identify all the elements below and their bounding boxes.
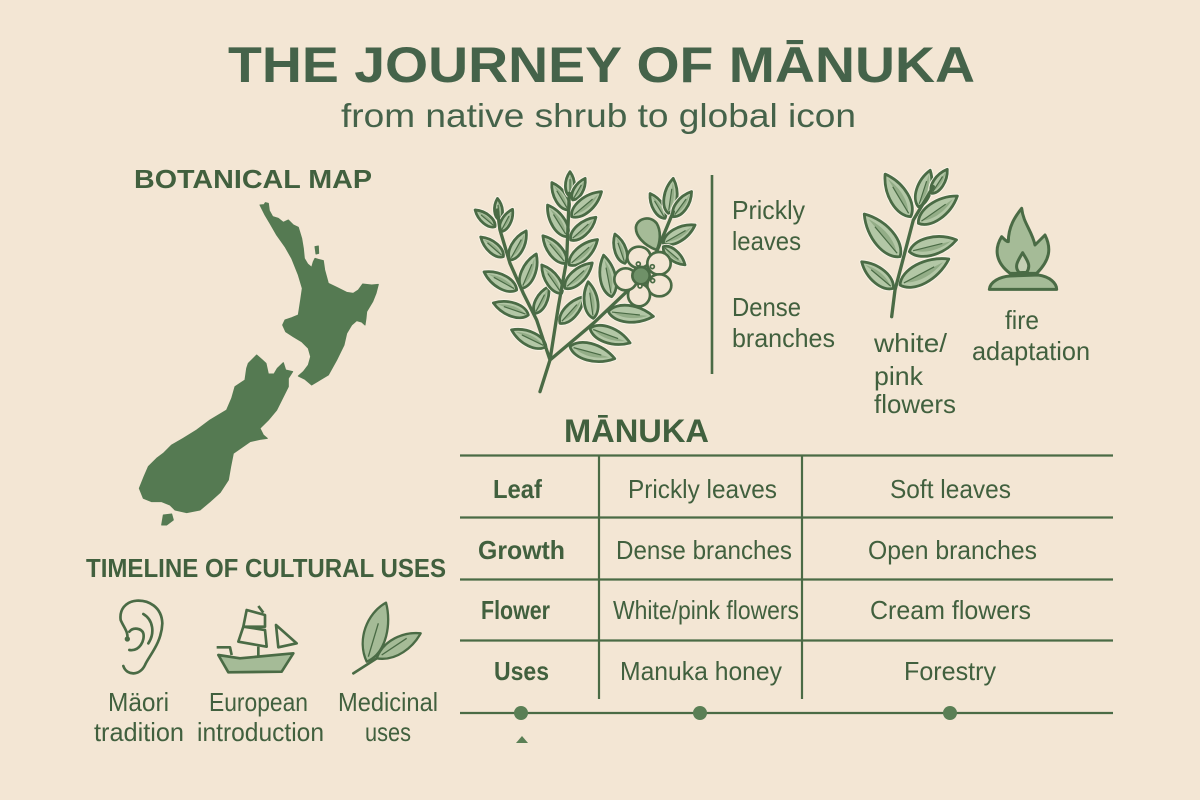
icon: fire <box>989 208 1057 289</box>
south island <box>139 355 293 513</box>
trait labels: Prickly <box>732 195 805 225</box>
timeline labels: Mäori <box>108 687 169 717</box>
icon: ship <box>217 606 297 672</box>
label: white/pink flowers <box>873 328 956 419</box>
table grid <box>460 455 1113 699</box>
icon: medicinal leaves <box>353 603 421 673</box>
comparison column: Cream flowers <box>870 595 1031 625</box>
row headers: Leaf <box>493 474 542 504</box>
icon: ear <box>120 601 162 673</box>
comparison column: Open branches <box>868 535 1037 565</box>
timeline labels <box>94 687 438 747</box>
row headers <box>478 474 565 686</box>
timeline labels: introduction <box>197 717 324 747</box>
label: white/pink flowers: flowers <box>874 389 956 419</box>
title: THE JOURNEY OF MĀNUKA <box>228 37 975 93</box>
heading: timeline of cultural uses: TIMELINE OF CULTURAL USES <box>86 553 446 583</box>
label: fire adaptation: adaptation <box>972 336 1090 366</box>
divider <box>711 175 713 374</box>
label: fire adaptation <box>972 305 1090 366</box>
comparison column: Forestry <box>904 656 996 686</box>
north island <box>260 203 378 385</box>
trait labels: Dense <box>732 292 801 322</box>
manuka column <box>613 474 799 686</box>
great barrier island <box>315 246 319 254</box>
label: white/pink flowers: white/ <box>873 328 948 358</box>
timeline labels: tradition <box>94 717 184 747</box>
row headers: Uses <box>494 656 549 686</box>
manuka column: Dense branches <box>616 535 792 565</box>
flower <box>614 247 671 306</box>
icon: manuka branch with flower <box>472 172 698 392</box>
stems <box>497 193 673 392</box>
timeline labels: Medicinal <box>338 687 438 717</box>
label: fire adaptation: fire <box>1005 305 1039 335</box>
table heading: MĀNUKA <box>564 413 709 449</box>
map: New Zealand <box>139 203 378 525</box>
manuka column: Manuka honey <box>620 656 782 686</box>
manuka column: Prickly leaves <box>628 474 777 504</box>
leaves <box>472 172 698 367</box>
icon: leaf sprig <box>856 166 962 317</box>
label: white/pink flowers: pink <box>874 361 924 391</box>
stewart island <box>162 514 173 525</box>
timeline line with markers <box>460 706 1113 743</box>
timeline labels: uses <box>365 717 411 747</box>
heading: botanical map: BOTANICAL MAP <box>134 164 372 194</box>
manuka column: White/pink flowers <box>613 595 799 625</box>
comparison table <box>460 455 1113 699</box>
row headers: Growth <box>478 535 565 565</box>
trait labels: leaves <box>732 226 801 256</box>
flower bud <box>636 219 660 250</box>
row headers: Flower <box>481 595 550 625</box>
trait labels <box>732 195 835 353</box>
trait labels: branches <box>732 323 835 353</box>
comparison column: Soft leaves <box>890 474 1011 504</box>
subtitle: from native shrub to global icon <box>341 97 856 134</box>
timeline labels: European <box>209 687 308 717</box>
comparison column <box>868 474 1037 686</box>
